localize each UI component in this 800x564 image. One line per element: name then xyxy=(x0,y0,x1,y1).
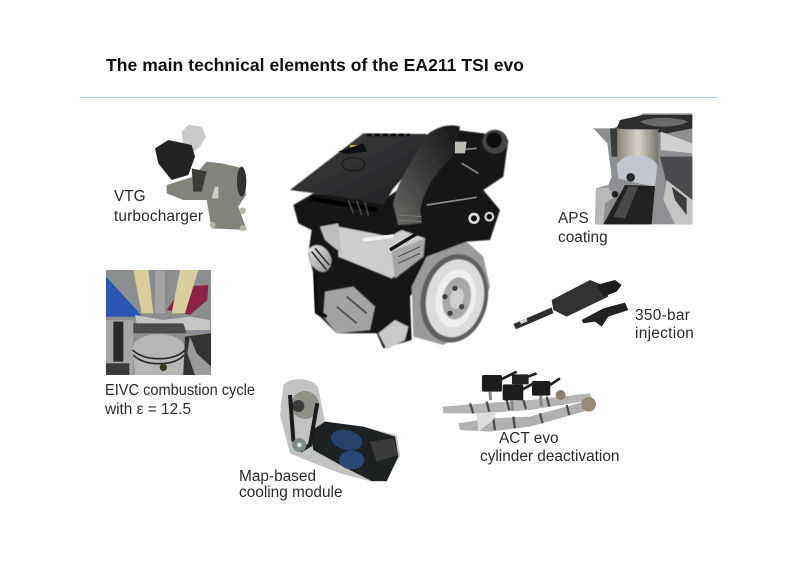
icon: VTG turbocharger xyxy=(155,125,247,231)
text: Map-based cooling module: Map-based xyxy=(239,468,316,485)
text: APS coating: coating xyxy=(558,229,608,246)
image: EIVC combustion chamber xyxy=(106,270,211,375)
text: ACT evo cylinder deactivation: ACT evo xyxy=(499,430,559,447)
icon: 350-bar injector xyxy=(513,280,628,329)
text: 350-bar injection: injection xyxy=(635,325,694,342)
text: VTG turbocharger: VTG xyxy=(114,188,146,205)
text: APS coating: APS xyxy=(558,210,589,227)
text: EIVC combustion cycle: EIVC combustion cycle xyxy=(105,382,255,399)
text: ACT evo cylinder deactivation: cylinder deactivation xyxy=(480,448,619,465)
text: VTG turbocharger: turbocharger xyxy=(114,208,203,225)
icon: ACT evo camshafts and actuators xyxy=(443,372,596,432)
text: Map-based cooling module: cooling module xyxy=(239,484,343,501)
image: APS coating cylinder block xyxy=(593,113,692,224)
text: 350-bar injection: 350-bar xyxy=(635,307,690,324)
text: EIVC combustion cycle: with ε = 12.5 xyxy=(104,401,191,418)
icon: map-based cooling module xyxy=(280,379,400,482)
title: The main technical elements of the EA211 TSI evo xyxy=(106,55,524,75)
icon: central engine xyxy=(290,125,508,349)
text: EIVC combustion cycle xyxy=(104,382,255,418)
text: VTG turbocharger xyxy=(114,188,203,225)
